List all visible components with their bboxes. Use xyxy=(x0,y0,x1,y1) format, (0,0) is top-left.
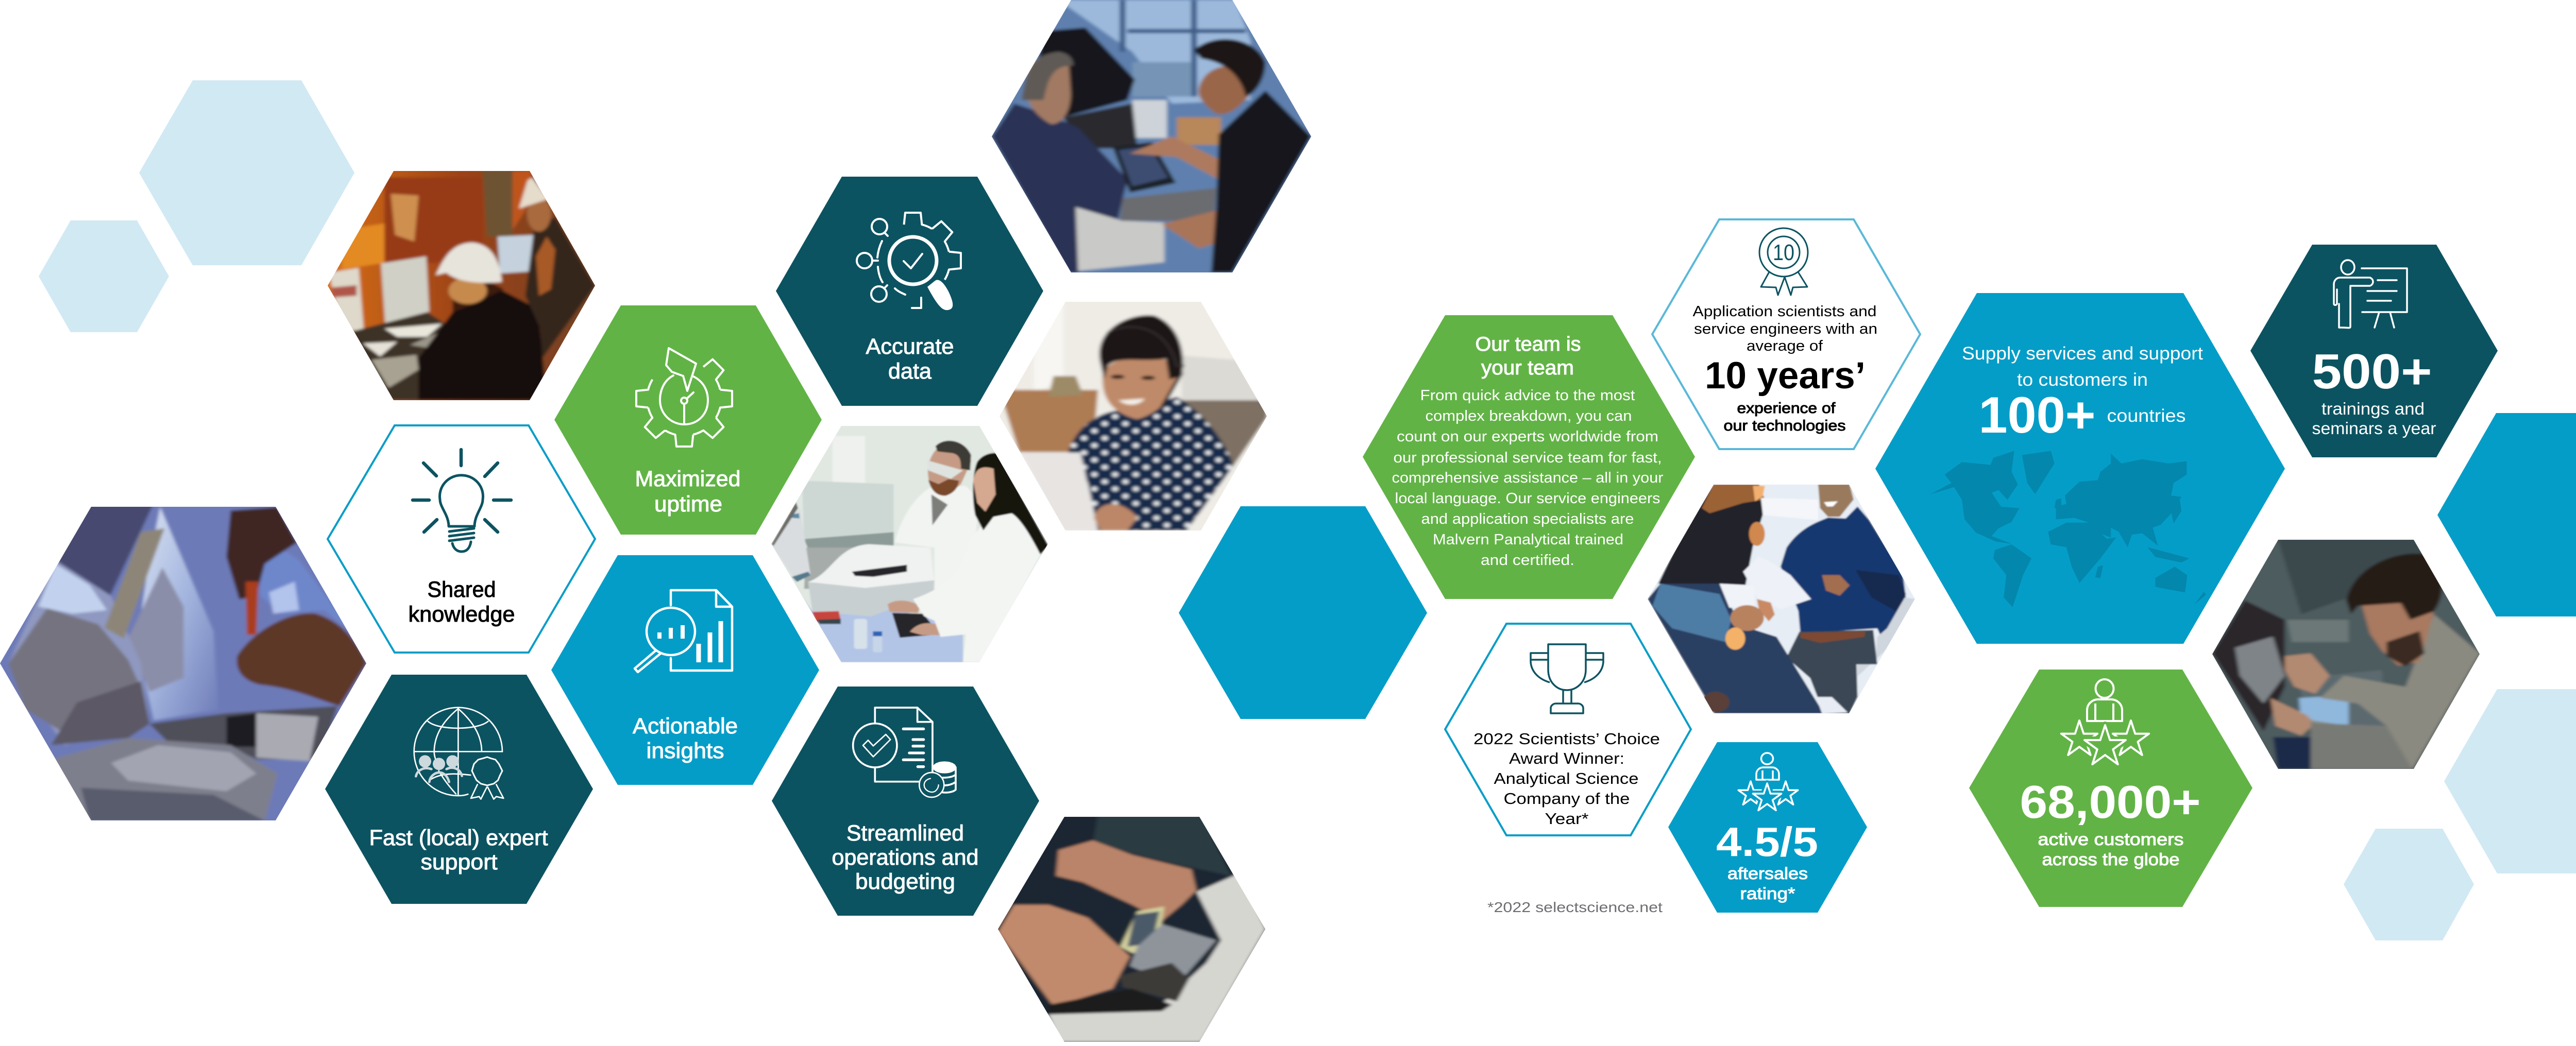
label: Accurate xyxy=(866,334,954,359)
icon: trophy xyxy=(1531,644,1603,713)
photo: hands calibrating a machine xyxy=(0,500,376,827)
body text: comprehensive assistance – all in your xyxy=(1392,470,1664,486)
decorative hexagon: small pale blue top left xyxy=(39,220,169,332)
label: aftersales xyxy=(1727,864,1808,883)
label xyxy=(2038,830,2183,869)
panel: accurate data xyxy=(776,177,1043,406)
label: rating* xyxy=(1740,884,1795,903)
big number: 500+ xyxy=(2312,344,2432,399)
photo: consultant and client with tablet xyxy=(985,0,1319,276)
description continued: experience of xyxy=(1737,400,1836,417)
panel: actionable insights xyxy=(551,555,819,785)
panel: scientists choice award xyxy=(1445,624,1691,835)
heading xyxy=(1476,333,1581,379)
hexagon outline xyxy=(1652,219,1920,449)
label xyxy=(832,821,979,894)
decorative hexagon: large pale blue top left xyxy=(139,80,354,265)
body text: our professional service team for fast, xyxy=(1393,450,1662,466)
panel: services in 100+ countries xyxy=(1875,293,2285,644)
decorative hexagon: large pale blue bottom right xyxy=(2444,689,2576,873)
label: Actionable xyxy=(633,714,738,739)
label: Award Winner: xyxy=(1509,749,1624,767)
description: average of xyxy=(1747,338,1823,354)
panel: 68,000+ active customers xyxy=(1969,670,2252,907)
body text xyxy=(1392,387,1664,569)
hexagon xyxy=(1668,742,1867,913)
hexagon xyxy=(554,305,822,535)
label: budgeting xyxy=(855,869,955,894)
label xyxy=(633,714,738,763)
hexagon xyxy=(776,177,1043,406)
description continued: our technologies xyxy=(1724,418,1845,434)
decorative hexagon: small pale blue bottom right xyxy=(2344,829,2474,940)
description xyxy=(1693,303,1877,354)
icon: person with three stars xyxy=(2061,679,2149,764)
label: support xyxy=(420,850,498,874)
hexagon xyxy=(1363,315,1695,599)
label: insights xyxy=(646,739,724,763)
big number: 100+ xyxy=(1978,386,2096,443)
label: Fast (local) expert xyxy=(369,826,548,850)
icon: person with three stars xyxy=(1738,753,1798,810)
hexagon outline xyxy=(328,425,595,653)
label: trainings and xyxy=(2321,399,2425,418)
intro text: Supply services and support xyxy=(1962,344,2203,364)
label: 2022 Scientists’ Choice xyxy=(1473,730,1660,748)
body text: and certified. xyxy=(1481,552,1574,569)
panel: streamlined operations and budgeting xyxy=(772,687,1039,916)
label: operations and xyxy=(832,845,979,870)
body text: and application specialists are xyxy=(1421,511,1634,527)
label: active customers xyxy=(2038,830,2183,849)
intro text xyxy=(1962,344,2203,390)
body text: From quick advice to the most xyxy=(1420,387,1635,404)
label: Shared xyxy=(428,577,496,602)
description continued xyxy=(1724,400,1845,434)
body text: count on our experts worldwide from xyxy=(1397,428,1658,445)
photo: operators in control room xyxy=(328,171,595,400)
description: Application scientists and xyxy=(1693,303,1876,320)
big number: 10 years’ xyxy=(1705,355,1866,397)
icon: report with magnifier and bars xyxy=(635,590,732,672)
label: across the globe xyxy=(2042,850,2179,869)
label: countries xyxy=(2107,406,2185,426)
icon: rosette with number 10: 10 xyxy=(1773,240,1794,265)
photo: smiling support agent with headset xyxy=(994,297,1275,538)
big number: 68,000+ xyxy=(2020,777,2201,828)
body text: Malvern Panalytical trained xyxy=(1433,531,1623,548)
panel: 4.5 of 5 aftersales rating xyxy=(1668,742,1867,913)
label: Streamlined xyxy=(846,821,964,846)
hexagon xyxy=(325,675,593,904)
decorative hexagon: solid blue right xyxy=(2437,413,2576,616)
label xyxy=(1473,730,1660,828)
icon: document with check and coins xyxy=(853,708,956,797)
icon: rosette with number 10 xyxy=(1759,228,1808,295)
photo: engineer servicing instrument xyxy=(2207,536,2490,774)
photo: two lab scientists at instrument xyxy=(768,424,1053,664)
label xyxy=(866,334,954,384)
label: uptime xyxy=(654,492,722,517)
icon: gear with stopwatch arrow xyxy=(636,348,732,447)
icon: presenter at board xyxy=(2334,260,2407,328)
heading: Our team is xyxy=(1476,333,1581,355)
chart: world map xyxy=(1930,451,2206,607)
panel: maximized uptime xyxy=(554,305,822,535)
label xyxy=(408,577,515,627)
label xyxy=(635,467,741,517)
panel: 10 years experience xyxy=(1652,219,1920,449)
icon: gear, magnifier and check xyxy=(857,213,961,310)
icon: globe with people and rosette xyxy=(414,708,503,799)
decorative hexagon: solid blue centre xyxy=(1179,506,1427,719)
body text: complex breakdown, you can xyxy=(1425,408,1632,424)
icon: light bulb xyxy=(413,450,511,552)
panel: our team is your team xyxy=(1363,315,1695,599)
label: Maximized xyxy=(635,467,741,491)
label xyxy=(2312,399,2436,438)
label xyxy=(1727,864,1808,903)
hexagon xyxy=(1969,670,2252,907)
label: knowledge xyxy=(408,602,515,627)
hexagon xyxy=(1875,293,2285,644)
label: data xyxy=(888,359,931,384)
body text: local language. Our service engineers xyxy=(1395,490,1660,507)
hexagon xyxy=(2250,245,2498,457)
panel: shared knowledge xyxy=(328,425,595,653)
hexagon xyxy=(772,687,1039,916)
photo: hands assembling a sample cell xyxy=(994,812,1270,1046)
rating number: 4.5/5 xyxy=(1716,819,1818,865)
label: seminars a year xyxy=(2312,419,2436,438)
hexagon xyxy=(551,555,819,785)
label: Company of the xyxy=(1503,790,1630,808)
intro text: to customers in xyxy=(2017,370,2148,390)
panel: 500+ trainings and seminars xyxy=(2250,245,2498,457)
description: service engineers with an xyxy=(1694,321,1877,337)
panel: fast local expert support xyxy=(325,675,593,904)
label: Analytical Science xyxy=(1494,769,1638,787)
label: Year* xyxy=(1545,810,1589,828)
footnote: *2022 selectscience.net xyxy=(1487,899,1663,915)
hexagon outline xyxy=(1445,624,1691,835)
photo: colleagues in bright office xyxy=(1645,483,1921,716)
label xyxy=(369,826,548,874)
heading: your team xyxy=(1481,357,1574,379)
